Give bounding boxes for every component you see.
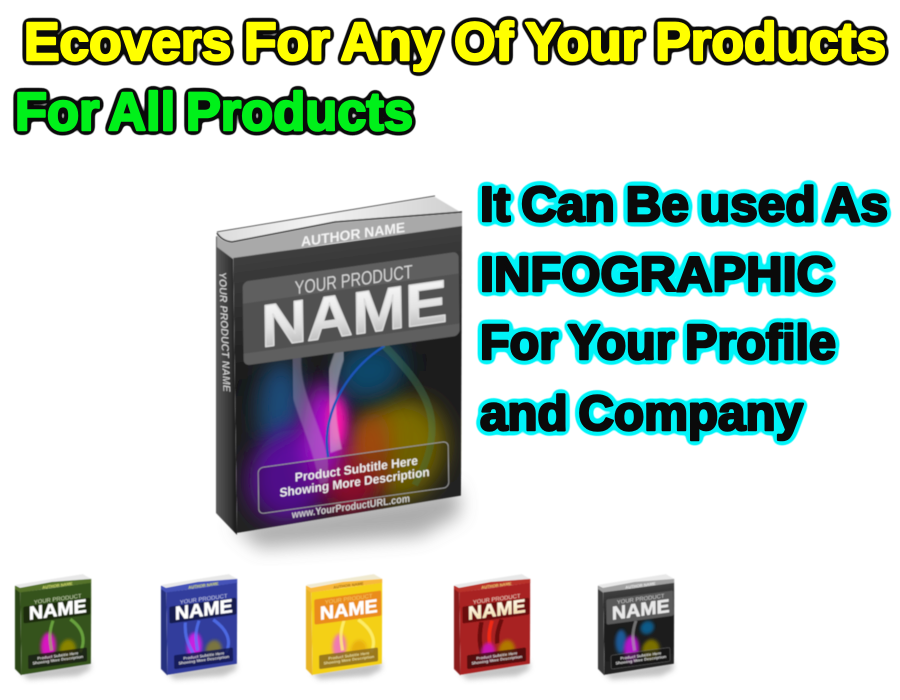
- book spine: [216, 213, 462, 535]
- subtitle box: Product Subtitle Here: [295, 454, 418, 485]
- main book cover: [216, 196, 469, 548]
- callout text: For Your Profile: [480, 316, 836, 370]
- thumbnail: yellow: Showing More Description: [324, 654, 375, 666]
- thumbnail: blue: Product Subtitle Here: [183, 650, 225, 661]
- thumbnail: blue: Showing More Description: [179, 654, 230, 666]
- author name: AUTHOR NAME: [301, 219, 405, 249]
- thumbnail: black: YOUR PRODUCT: [617, 594, 665, 606]
- thumbnail: red: Showing More Description: [472, 654, 523, 666]
- thumbnail: red: Product Subtitle Here: [476, 650, 518, 661]
- thumbnail: blue: YOUR PRODUCT: [180, 594, 228, 606]
- thumbnail: black: Showing More Description: [616, 654, 667, 666]
- thumbnail: yellow: NAME: [320, 596, 378, 625]
- thumbnail: black: AUTHOR NAME: [625, 581, 656, 590]
- subtitle: For All Products: [15, 82, 413, 142]
- thumbnail: blue: NAME: [175, 596, 233, 625]
- thumbnail: black: Product Subtitle Here: [620, 650, 662, 661]
- thumbnail: black: [598, 574, 676, 679]
- thumbnail: green: AUTHOR NAME: [42, 581, 73, 590]
- callout text: and Company: [480, 387, 803, 441]
- callout text: [480, 178, 888, 441]
- thumbnail: black: NAME: [612, 596, 670, 625]
- name: NAME: [261, 266, 448, 360]
- thumbnail: green: Product Subtitle Here: [37, 650, 79, 661]
- thumbnail: blue: AUTHOR NAME: [188, 581, 219, 590]
- thumbnail: red: [454, 574, 532, 679]
- url: www.YourProductURL.com: [291, 493, 410, 521]
- thumbnail: yellow: [306, 574, 384, 679]
- book pages: [217, 197, 462, 242]
- thumbnail: yellow: AUTHOR NAME: [333, 581, 364, 590]
- name panel: [243, 252, 460, 366]
- thumbnail: green: Showing More Description: [33, 654, 84, 666]
- thumbnail: green: YOUR PRODUCT: [34, 594, 82, 606]
- thumbnail: red: AUTHOR NAME: [481, 581, 512, 590]
- thumbnail: yellow: YOUR PRODUCT: [325, 594, 373, 606]
- callout text: INFOGRAPHIC: [480, 248, 833, 302]
- book front: [233, 211, 469, 535]
- subtitle box: Showing More Description: [279, 465, 430, 500]
- colour swirl: [248, 333, 446, 527]
- thumbnail: green: NAME: [29, 596, 87, 625]
- ground shadow: [232, 487, 460, 548]
- title: Ecovers For Any Of Your Products: [24, 12, 886, 72]
- thumbnail: green: [15, 574, 93, 679]
- thumbnail: blue: [161, 574, 239, 679]
- your product: YOUR PRODUCT: [295, 262, 413, 299]
- spine title: YOUR PRODUCT NAME: [216, 272, 232, 393]
- callout text: It Can Be used As: [480, 178, 888, 232]
- thumbnail: yellow: Product Subtitle Here: [328, 650, 370, 661]
- thumbnail: red: NAME: [468, 596, 526, 625]
- thumbnail: red: YOUR PRODUCT: [473, 594, 521, 606]
- subtitle box: [258, 441, 449, 514]
